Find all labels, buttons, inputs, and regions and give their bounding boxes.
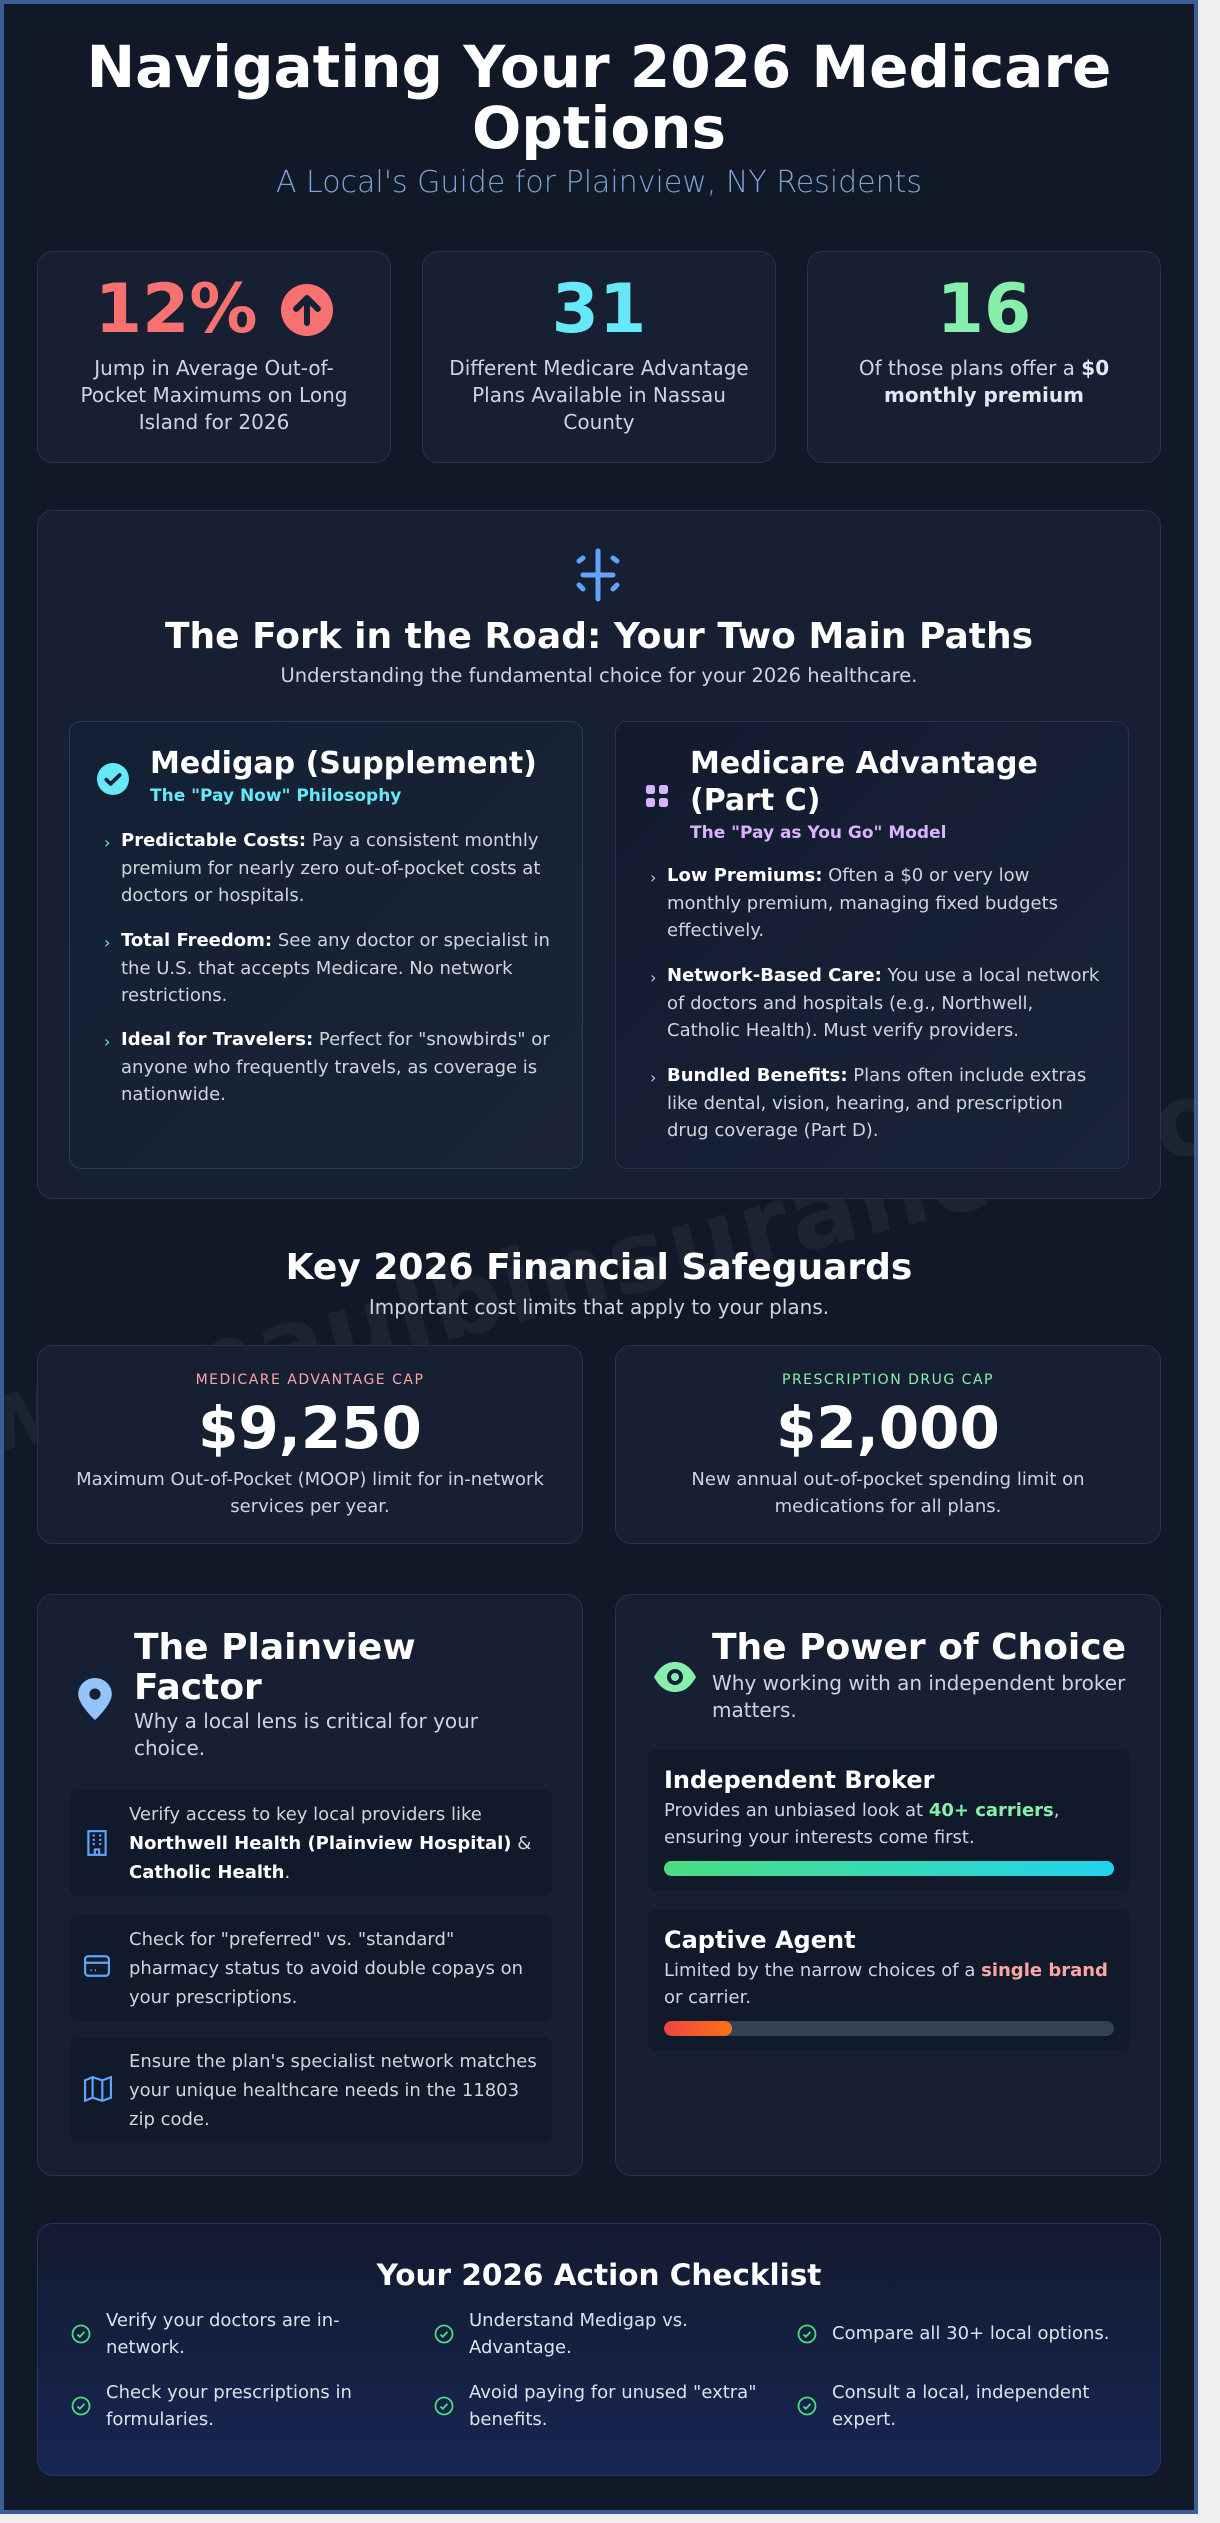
subtitle: A Local's Guide for Plainview, NY Residents — [276, 165, 922, 200]
card: medicare advantage: Network-Based Care: You use a local network of doctors and hospitals (e.g., Northwell, Catholic Health). Must verify providers. — [667, 965, 1099, 1041]
card: drug cap: New annual out-of-pocket spending limit on medications for all plans. — [691, 1469, 1085, 1517]
panel: checklist: Compare all 30+ local options. — [832, 2323, 1110, 2344]
heading: The Fork in the Road: Your Two Main Paths — [165, 616, 1033, 657]
title: Navigating Your 2026 Medicare — [87, 33, 1111, 101]
icon: fork — [576, 548, 620, 602]
subheading: safeguards: Important cost limits that apply to your plans. — [369, 1295, 829, 1319]
panel: plainview factor: Why a local lens is critical for your choice. — [134, 1709, 478, 1760]
heading: safeguards: Key 2026 Financial Safeguards — [286, 1247, 912, 1288]
panel: checklist: Check your prescriptions in formularies. — [106, 2382, 352, 2430]
bar: captive — [664, 2021, 1114, 2036]
card: medicare advantage: › — [650, 968, 656, 987]
icon: pin — [78, 1678, 112, 1720]
bar: broker — [664, 1861, 1114, 1876]
panel: plainview factor: Factor — [134, 1667, 262, 1708]
checklist items: Verify your doctors are in-network. — [106, 2310, 340, 2358]
item: network — [70, 2037, 552, 2143]
card: medicare advantage: The "Pay as You Go" Model — [690, 823, 946, 843]
box: independent broker: Provides an unbiased look at 40+ carriers, ensuring your interests come first. — [664, 1800, 1060, 1848]
card: MA cap: $9,250 — [198, 1394, 422, 1462]
item: pharmacy: Check for "preferred" vs. "standard" pharmacy status to avoid double copays on your prescriptions. — [129, 1929, 523, 2008]
panel: checklist: Avoid paying for unused "extra" benefits. — [469, 2382, 756, 2430]
panel: checklist: Your 2026 Action Checklist — [377, 2258, 821, 2292]
card: medigap: › — [104, 1032, 110, 1051]
card: medigap: Predictable Costs: Pay a consistent monthly premium for nearly zero out-of-pocket costs at doctors or hospitals. — [121, 830, 540, 906]
panel: checklist: Understand Medigap vs. Advantage. — [469, 2310, 688, 2358]
card: medigap — [69, 721, 583, 1169]
item: network: Ensure the plan's specialist network matches your unique healthcare needs in the 11803 zip code. — [129, 2051, 537, 2130]
title — [87, 33, 1111, 162]
subheading: Understanding the fundamental choice for your 2026 healthcare. — [281, 664, 917, 687]
card: medigap: › — [104, 933, 110, 952]
card: medicare advantage: (Part C) — [690, 783, 820, 818]
box: captive agent — [648, 1910, 1130, 2051]
card: medicare advantage — [615, 721, 1129, 1169]
panel: plainview factor — [37, 1594, 583, 2176]
card: MA cap — [37, 1345, 583, 1544]
stat card: 16: Of those plans offer a $0 monthly premium — [859, 356, 1109, 407]
panel: checklist — [37, 2223, 1161, 2476]
card: medigap: Medigap (Supplement) — [150, 746, 537, 781]
panel: plainview factor: The Plainview — [134, 1627, 416, 1668]
card: medicare advantage: › — [650, 868, 656, 887]
card: drug cap — [615, 1345, 1161, 1544]
box: captive agent: Limited by the narrow choices of a single brand or carrier. — [664, 1960, 1108, 2008]
panel: power of choice: The Power of Choice — [712, 1627, 1126, 1668]
stat card: 31: 31 — [552, 270, 646, 349]
stat card: 12%: 12% — [95, 270, 258, 349]
stat card: 31 — [422, 251, 776, 463]
card: drug cap: $2,000 — [776, 1394, 1000, 1462]
item: providers: Verify access to key local providers like Northwell Health (Plainview Hospital) & Catholic Health. — [129, 1804, 531, 1883]
card: MA cap: Maximum Out-of-Pocket (MOOP) limit for in-network services per year. — [76, 1469, 544, 1517]
card: medicare advantage: Bundled Benefits: Plans often include extras like dental, vision, hearing, and prescription drug coverage (Part D). — [667, 1065, 1086, 1141]
card: drug cap: PRESCRIPTION DRUG CAP — [782, 1372, 994, 1388]
panel: fork in the road — [37, 510, 1161, 1199]
stat card: 16: 16 — [937, 270, 1031, 349]
box: captive agent: Captive Agent — [664, 1926, 856, 1954]
icon: check circle — [97, 763, 129, 795]
panel: power of choice — [615, 1594, 1161, 2176]
title: Options — [472, 94, 726, 162]
card: medigap: Ideal for Travelers: Perfect for "snowbirds" or anyone who frequently travels, as coverage is nationwide. — [121, 1029, 550, 1105]
card: medigap: Total Freedom: See any doctor or specialist in the U.S. that accepts Medicare. No network restrictions. — [121, 930, 550, 1006]
panel: checklist: Consult a local, independent expert. — [832, 2382, 1089, 2430]
item: providers — [70, 1790, 552, 1896]
card: medigap: › — [104, 833, 110, 852]
card: medicare advantage: › — [650, 1068, 656, 1087]
card: MA cap: MEDICARE ADVANTAGE CAP — [196, 1372, 424, 1388]
icon: grid — [646, 785, 668, 807]
card: medigap: The "Pay Now" Philosophy — [150, 786, 401, 806]
stat card: 12%: Jump in Average Out-of-Pocket Maximums on Long Island for 2026 — [81, 356, 347, 434]
stat card: 31: Different Medicare Advantage Plans Available in Nassau County — [449, 356, 749, 434]
stat card: 16 — [807, 251, 1161, 463]
stat card: 12% — [37, 251, 391, 463]
item: pharmacy — [70, 1915, 552, 2021]
box: independent broker: Independent Broker — [664, 1766, 934, 1794]
card: medicare advantage: Medicare Advantage — [690, 746, 1038, 781]
card: medicare advantage: Low Premiums: Often a $0 or very low monthly premium, managing fixed budgets effectively. — [667, 865, 1058, 941]
icon: eye — [654, 1662, 696, 1692]
box: independent broker — [648, 1750, 1130, 1891]
panel: power of choice: Why working with an independent broker matters. — [712, 1671, 1125, 1722]
